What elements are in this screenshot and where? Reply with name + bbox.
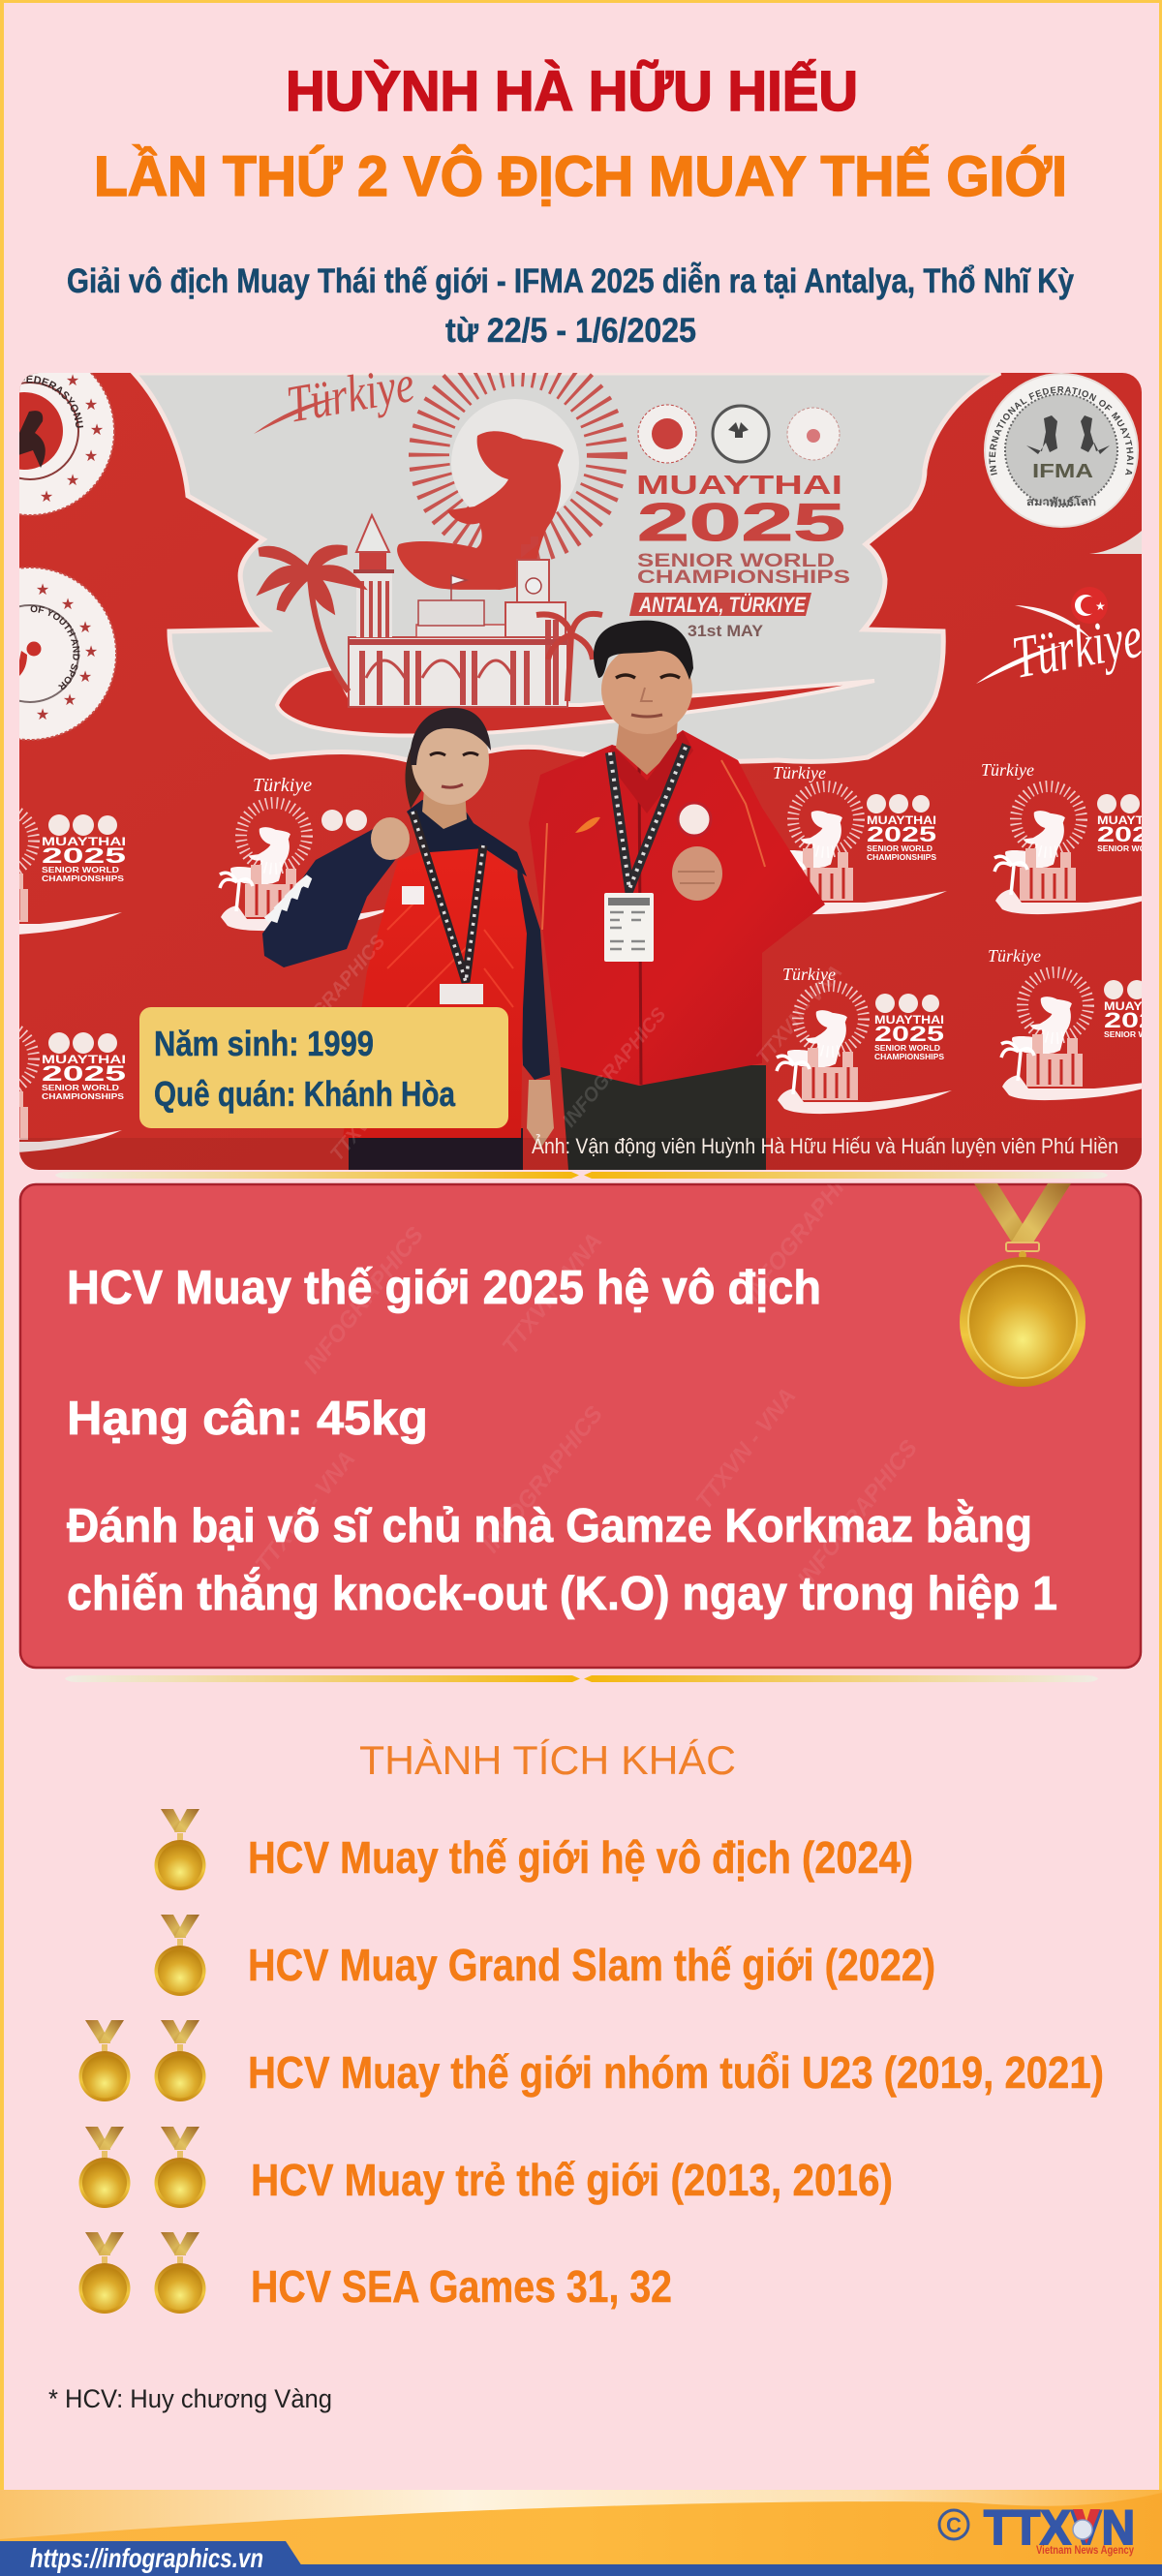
athlete hair xyxy=(411,708,491,765)
agency logo: C xyxy=(946,2513,962,2537)
title line 1: HUỲNH HÀ HỮU HIẾU xyxy=(286,60,858,123)
athlete vest xyxy=(343,848,527,1138)
IFMA seal: สมาพันธ์โลก xyxy=(1026,494,1096,509)
panel watermarks: INFOGRAPHICS xyxy=(298,1222,429,1379)
repeated logo right row 2: 2025 xyxy=(874,1022,944,1046)
photo backdrop red xyxy=(19,373,1142,1170)
athlete head xyxy=(412,716,489,805)
achievement headline: HCV Muay thế giới 2025 hệ vô địch xyxy=(67,1262,821,1314)
championship logo xyxy=(260,366,874,736)
panel watermarks: TTXVN - VNA xyxy=(690,1383,801,1515)
athlete facial features xyxy=(430,753,478,755)
panel watermarks: TTXVN - VNA xyxy=(497,1228,607,1360)
repeated logo right row 2: MUAYTHAI xyxy=(874,1013,944,1027)
repeated logo far right row 1: Türkiye xyxy=(981,760,1034,780)
panel watermarks: INFOGRAPHICS xyxy=(739,1150,870,1306)
sleeve chevrons xyxy=(266,877,309,922)
agency logo: TTXVN xyxy=(984,2500,1135,2555)
federation seal: ★ xyxy=(84,397,98,414)
logo wordmark: SENIOR WORLD xyxy=(637,551,835,571)
panel watermarks: INFOGRAPHICS xyxy=(792,1435,923,1592)
script logo Türkiye left: Türkiye xyxy=(283,354,418,434)
achievement SEA Games: HCV SEA Games 31, 32 xyxy=(251,2261,672,2312)
repeated logo right row 2 xyxy=(777,965,952,1114)
divider above red panel xyxy=(55,1172,1108,1179)
logo wordmark: 2025 xyxy=(637,492,845,552)
repeated backdrop logos xyxy=(0,760,1162,1153)
repeated logo right row 1: Türkiye xyxy=(773,763,826,782)
heading: other achievements: THÀNH TÍCH KHÁC xyxy=(359,1737,736,1783)
kicker silhouette xyxy=(397,431,564,590)
footnote: * HCV: Huy chương Vàng xyxy=(48,2384,332,2413)
palm tree right xyxy=(536,614,602,701)
federation seal: ★ xyxy=(84,448,98,465)
Turkish flag emblem xyxy=(1071,587,1108,624)
coach jacket xyxy=(529,730,825,1086)
Turkish flag emblem: ★ xyxy=(1095,599,1106,613)
swoosh xyxy=(277,668,874,736)
panel: photo of athlete and coach xyxy=(19,373,1142,1170)
repeated logo far right row 2: Türkiye xyxy=(988,946,1041,966)
icons: medals row 3 xyxy=(79,2020,205,2101)
athlete lanyard xyxy=(413,812,483,982)
logo wordmark: MUAYTHAI xyxy=(636,470,842,500)
repeated logo right row 1: MUAYTHAI xyxy=(867,813,936,827)
repeated logo right row 2: Türkiye xyxy=(782,965,836,984)
victory line 2: chiến thắng knock-out (K.O) ngay trong hiệp 1 xyxy=(67,1567,1057,1620)
repeated logo far left row 2: CHAMPIONSHIPS xyxy=(42,1092,125,1101)
ministry seal: ★ xyxy=(63,692,76,709)
ministry seal: ★ xyxy=(78,620,92,636)
repeated logo far left row 1: CHAMPIONSHIPS xyxy=(42,874,125,883)
achievement 2022: HCV Muay Grand Slam thế giới (2022) xyxy=(248,1940,935,1990)
achievement youth: HCV Muay trẻ thế giới (2013, 2016) xyxy=(251,2155,893,2205)
panel: gold medal achievement xyxy=(20,1150,1141,1668)
coach trousers xyxy=(561,1065,766,1170)
icons: medals row 5 xyxy=(79,2232,205,2314)
script logo Türkiye left xyxy=(254,373,413,434)
federation seal: ★ xyxy=(40,489,53,506)
weight class: Hạng cân: 45kg xyxy=(67,1393,428,1445)
ministry seal: ★ xyxy=(36,582,49,598)
repeated logo far left row 1: SENIOR WORLD xyxy=(42,866,119,874)
title line 2: LẦN THỨ 2 VÔ ĐỊCH MUAY THẾ GIỚI xyxy=(94,145,1067,208)
repeated logo far left row 2: 2025 xyxy=(42,1061,126,1086)
coach figure xyxy=(529,621,825,1170)
photo bottom shade xyxy=(19,1138,1142,1170)
small seals xyxy=(638,405,840,463)
photo watermarks: INFOGRAPHICS xyxy=(559,1003,671,1131)
repeated logo far right row 1 xyxy=(981,760,1162,914)
athlete neck xyxy=(422,789,467,829)
palm tree xyxy=(260,549,356,691)
repeated logo right row 1: CHAMPIONSHIPS xyxy=(867,853,937,862)
repeated logo far left row 1: MUAYTHAI xyxy=(42,835,126,848)
repeated logo far right row 2: 2025 xyxy=(1104,1008,1162,1032)
logo wordmark: 31st MAY xyxy=(688,622,764,640)
icons: medals row 4 xyxy=(79,2127,205,2208)
repeated logo right row 1: 2025 xyxy=(867,822,936,846)
coach head xyxy=(601,645,692,734)
repeated logo right row 1 xyxy=(772,763,947,914)
IFMA seal: INTERNATIONAL FEDERATION OF MUAYTHAI ASSOCIATIONS xyxy=(989,386,1134,475)
photo watermarks xyxy=(278,931,847,1165)
athlete card xyxy=(440,984,483,1004)
subtitle xyxy=(67,261,1074,350)
panel watermarks xyxy=(250,1150,923,1592)
callout: birth year and hometown xyxy=(139,1007,508,1128)
athlete navy sleeve xyxy=(262,826,398,967)
coach neck xyxy=(616,717,678,775)
athlete collar xyxy=(407,800,527,876)
federation seal xyxy=(19,373,115,516)
footer band xyxy=(0,2490,1162,2576)
photo watermarks: TTXVN - VNA xyxy=(326,1058,421,1165)
ministry seal: ★ xyxy=(84,644,98,660)
divider below red panel xyxy=(65,1675,1098,1682)
achievement 2024: HCV Muay thế giới hệ vô địch (2024) xyxy=(248,1832,913,1883)
script logo Türkiye right xyxy=(976,604,1147,691)
repeated logo far left row 1 xyxy=(0,808,126,935)
ministry seal: ★ xyxy=(61,597,75,613)
repeated logo far left row 2 xyxy=(0,1026,126,1153)
repeated logo right row 1: SENIOR WORLD xyxy=(867,844,933,853)
coach facial features xyxy=(616,675,680,678)
agency logo: Vietnam News Agency xyxy=(1036,2545,1134,2557)
repeated logo far left row 2: MUAYTHAI xyxy=(42,1053,126,1066)
footer blue strip xyxy=(0,2564,1162,2576)
repeated logo far left row 2: SENIOR WORLD xyxy=(42,1084,119,1092)
repeated logo far right row 2 xyxy=(988,946,1162,1100)
footer url: https://infographics.vn xyxy=(30,2543,263,2573)
athlete trousers xyxy=(349,1128,523,1172)
coach jacket logo xyxy=(678,803,711,836)
palace building xyxy=(349,515,567,707)
icon: large gold medal xyxy=(960,1183,1086,1387)
photo watermarks: INFOGRAPHICS xyxy=(278,931,390,1058)
athlete figure xyxy=(262,708,554,1172)
coach accreditation card xyxy=(604,893,654,962)
logo wordmark: CHAMPIONSHIPS xyxy=(637,567,850,588)
panel watermarks: INFOGRAPHICS xyxy=(477,1401,608,1558)
federation seal: ★ xyxy=(66,473,79,489)
ministry seal xyxy=(19,567,117,741)
athlete fist xyxy=(371,817,410,860)
ministry seal: ★ xyxy=(36,707,49,723)
repeated logo right row 2: CHAMPIONSHIPS xyxy=(874,1053,945,1061)
logo wordmark xyxy=(629,470,850,640)
repeated logo far left row 1: 2025 xyxy=(42,843,126,868)
icon: medal row 2 xyxy=(155,1915,205,1996)
logo wordmark: ANTALYA, TÜRKIYE xyxy=(638,593,807,617)
repeated logo centre left row 1 xyxy=(220,775,395,931)
repeated logo far right row 1: 2025 xyxy=(1097,822,1162,846)
right banner sliver xyxy=(1089,531,1142,554)
coach hair xyxy=(594,621,693,680)
backdrop banner xyxy=(134,373,1000,765)
photo watermarks: TTXVN - VNA xyxy=(752,962,847,1068)
vest badge xyxy=(402,886,424,905)
federation seal: ★ xyxy=(90,422,104,439)
repeated logo right row 2: SENIOR WORLD xyxy=(874,1044,940,1053)
birth year: Năm sinh: 1999 xyxy=(154,1024,374,1063)
IFMA seal: IFMA xyxy=(1032,461,1093,482)
repeated logo far right row 1: SENIOR WORLD xyxy=(1097,844,1162,853)
icon: medal row 1 xyxy=(155,1809,205,1890)
subtitle line 2: từ 22/5 - 1/6/2025 xyxy=(445,312,696,350)
athlete right sleeve xyxy=(517,857,550,1080)
coach lanyard xyxy=(610,745,687,889)
list: other achievements xyxy=(79,1809,1104,2314)
panel watermarks: TTXVN - VNA xyxy=(250,1446,360,1578)
sun rays xyxy=(429,366,607,544)
repeated logo far right row 1: MUAYTHAI xyxy=(1097,813,1162,827)
victory line 1: Đánh bại võ sĩ chủ nhà Gamze Korkmaz bằng xyxy=(67,1499,1032,1552)
athlete hand xyxy=(527,1080,554,1149)
coach fist xyxy=(672,846,722,901)
athlete ponytail xyxy=(405,746,422,809)
IFMA seal xyxy=(984,373,1139,528)
federation seal: ★ xyxy=(66,373,79,389)
title xyxy=(94,60,1067,208)
hometown: Quê quán: Khánh Hòa xyxy=(154,1074,456,1114)
ministry seal: ★ xyxy=(78,669,92,686)
repeated logo centre left row 1: Türkiye xyxy=(253,775,312,796)
federation seal: FEDERASYONU xyxy=(23,376,83,428)
